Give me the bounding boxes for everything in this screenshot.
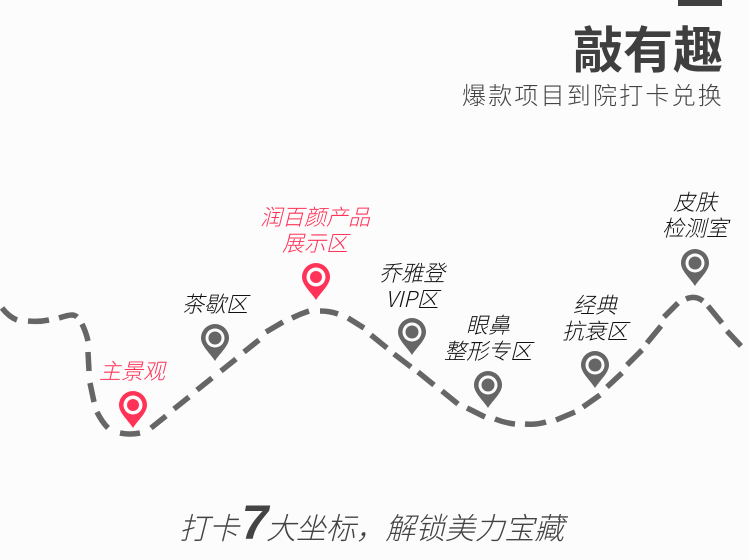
label: 乔雅登VIP区: VIP区 <box>385 282 439 314</box>
dashed route line <box>2 297 741 434</box>
top accent bar <box>678 0 722 6</box>
label: 皮肤检测室: 皮肤 <box>673 185 717 217</box>
pin: 主景观 <box>119 391 147 428</box>
label: 皮肤检测室: 检测室 <box>662 211 728 243</box>
label: 润百颜产品展示区: 润百颜产品 <box>260 200 370 232</box>
label: 眼鼻整形专区: 眼鼻 <box>466 308 510 340</box>
subtitle: 爆款项目到院打卡兑换 <box>462 83 724 110</box>
label: 润百颜产品展示区 <box>260 200 370 258</box>
label: 眼鼻整形专区 <box>444 308 535 366</box>
pin: 经典抗衰区 <box>581 351 609 388</box>
label: 经典抗衰区: 经典 <box>573 288 617 320</box>
pin: 润百颜产品展示区 <box>302 263 330 300</box>
label: 经典抗衰区: 抗衰区 <box>562 314 628 346</box>
pin: 眼鼻整形专区 <box>474 371 502 408</box>
label: 乔雅登VIP区: 乔雅登 <box>379 256 445 288</box>
label: 主景观: 主景观 <box>99 354 165 386</box>
label: 经典抗衰区 <box>562 288 631 346</box>
pin: 茶歇区 <box>201 324 229 361</box>
title: 敲有趣 <box>573 23 723 79</box>
label: 乔雅登VIP区 <box>379 256 447 314</box>
label: 眼鼻整形专区: 整形专区 <box>444 334 532 366</box>
bottom slogan: 打卡7大坐标，解锁美力宝藏 <box>179 497 564 550</box>
pin: 皮肤检测室 <box>681 249 709 286</box>
label: 皮肤检测室 <box>662 185 730 243</box>
pin: 乔雅登VIP区 <box>398 318 426 355</box>
label: 润百颜产品展示区: 展示区 <box>282 226 348 258</box>
label: 茶歇区: 茶歇区 <box>182 287 248 319</box>
